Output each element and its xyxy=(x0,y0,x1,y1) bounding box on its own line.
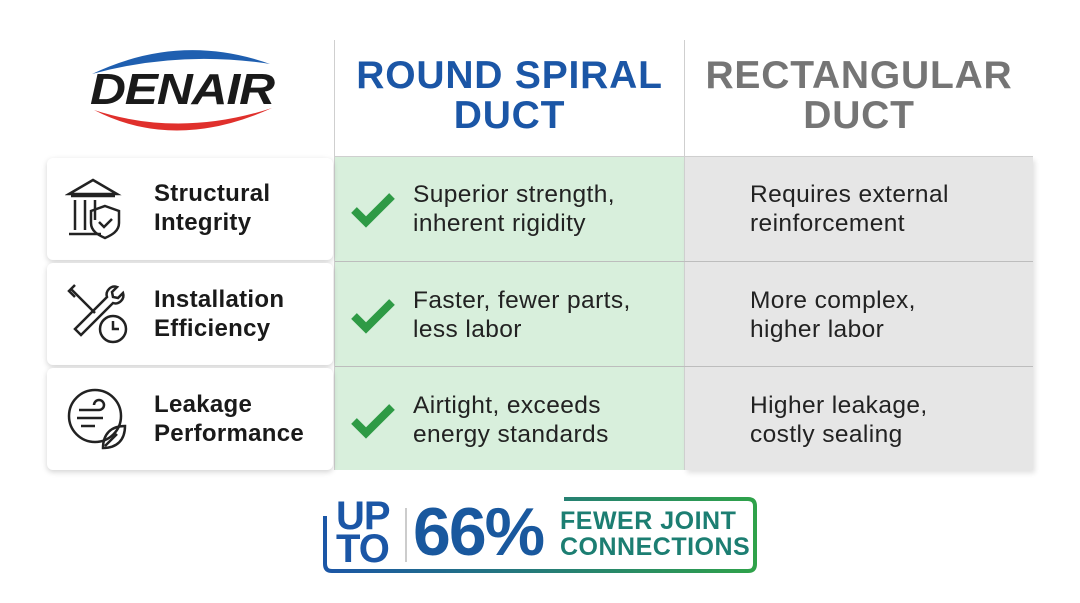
heading: round spiral duct: ROUND SPIRAL xyxy=(356,54,663,97)
row 1 rect: reinforcement xyxy=(750,210,905,237)
heading: round spiral duct xyxy=(356,54,663,137)
row 2 label card xyxy=(47,263,333,365)
row 1 label card xyxy=(47,158,333,260)
row 2 label card: Efficiency xyxy=(154,315,270,342)
row 1 rect xyxy=(750,181,949,237)
row 2 round: Faster, fewer parts, xyxy=(413,287,631,314)
heading: rectangular duct xyxy=(705,54,1013,137)
row 3 rect: costly sealing xyxy=(750,421,903,448)
row 2 label card: Installation xyxy=(154,286,284,313)
row 1 round: Superior strength, xyxy=(413,181,615,208)
row 2 rect: higher labor xyxy=(750,316,884,343)
row 1 round: inherent rigidity xyxy=(413,210,586,237)
callout badge: TO xyxy=(336,527,389,571)
callout badge: CONNECTIONS xyxy=(560,533,750,561)
row 3 label card: Leakage xyxy=(154,391,252,418)
row 1 rect: Requires external xyxy=(750,181,949,208)
callout badge: UP xyxy=(336,494,390,538)
logo: DENAIR xyxy=(90,65,275,114)
heading: round spiral duct: DUCT xyxy=(454,94,565,137)
icon: air leaf xyxy=(68,388,126,450)
row 3 round: Airtight, exceeds xyxy=(413,392,601,419)
row 3 round xyxy=(351,392,609,448)
row 3 label card: Performance xyxy=(154,420,304,447)
row 3 round: energy standards xyxy=(413,421,609,448)
row 2 round: less labor xyxy=(413,316,522,343)
row 2 round xyxy=(351,287,631,343)
row 3 rect xyxy=(750,392,928,448)
callout badge xyxy=(323,494,757,573)
heading: rectangular duct: RECTANGULAR xyxy=(705,54,1013,97)
icon: tools clock xyxy=(67,284,128,344)
icon: building shield xyxy=(65,178,122,240)
heading: rectangular duct: DUCT xyxy=(803,94,915,137)
row 1 round xyxy=(351,181,615,237)
callout badge: FEWER JOINT xyxy=(560,507,736,535)
logo xyxy=(90,50,275,130)
row 2 rect xyxy=(750,287,916,343)
table background xyxy=(335,157,684,470)
row 3 rect: Higher leakage, xyxy=(750,392,928,419)
callout badge: 66% xyxy=(413,494,543,570)
row 1 label card: Structural xyxy=(154,180,270,207)
row 2 rect: More complex, xyxy=(750,287,916,314)
row 1 label card: Integrity xyxy=(154,209,251,236)
row 3 label card xyxy=(47,368,333,470)
